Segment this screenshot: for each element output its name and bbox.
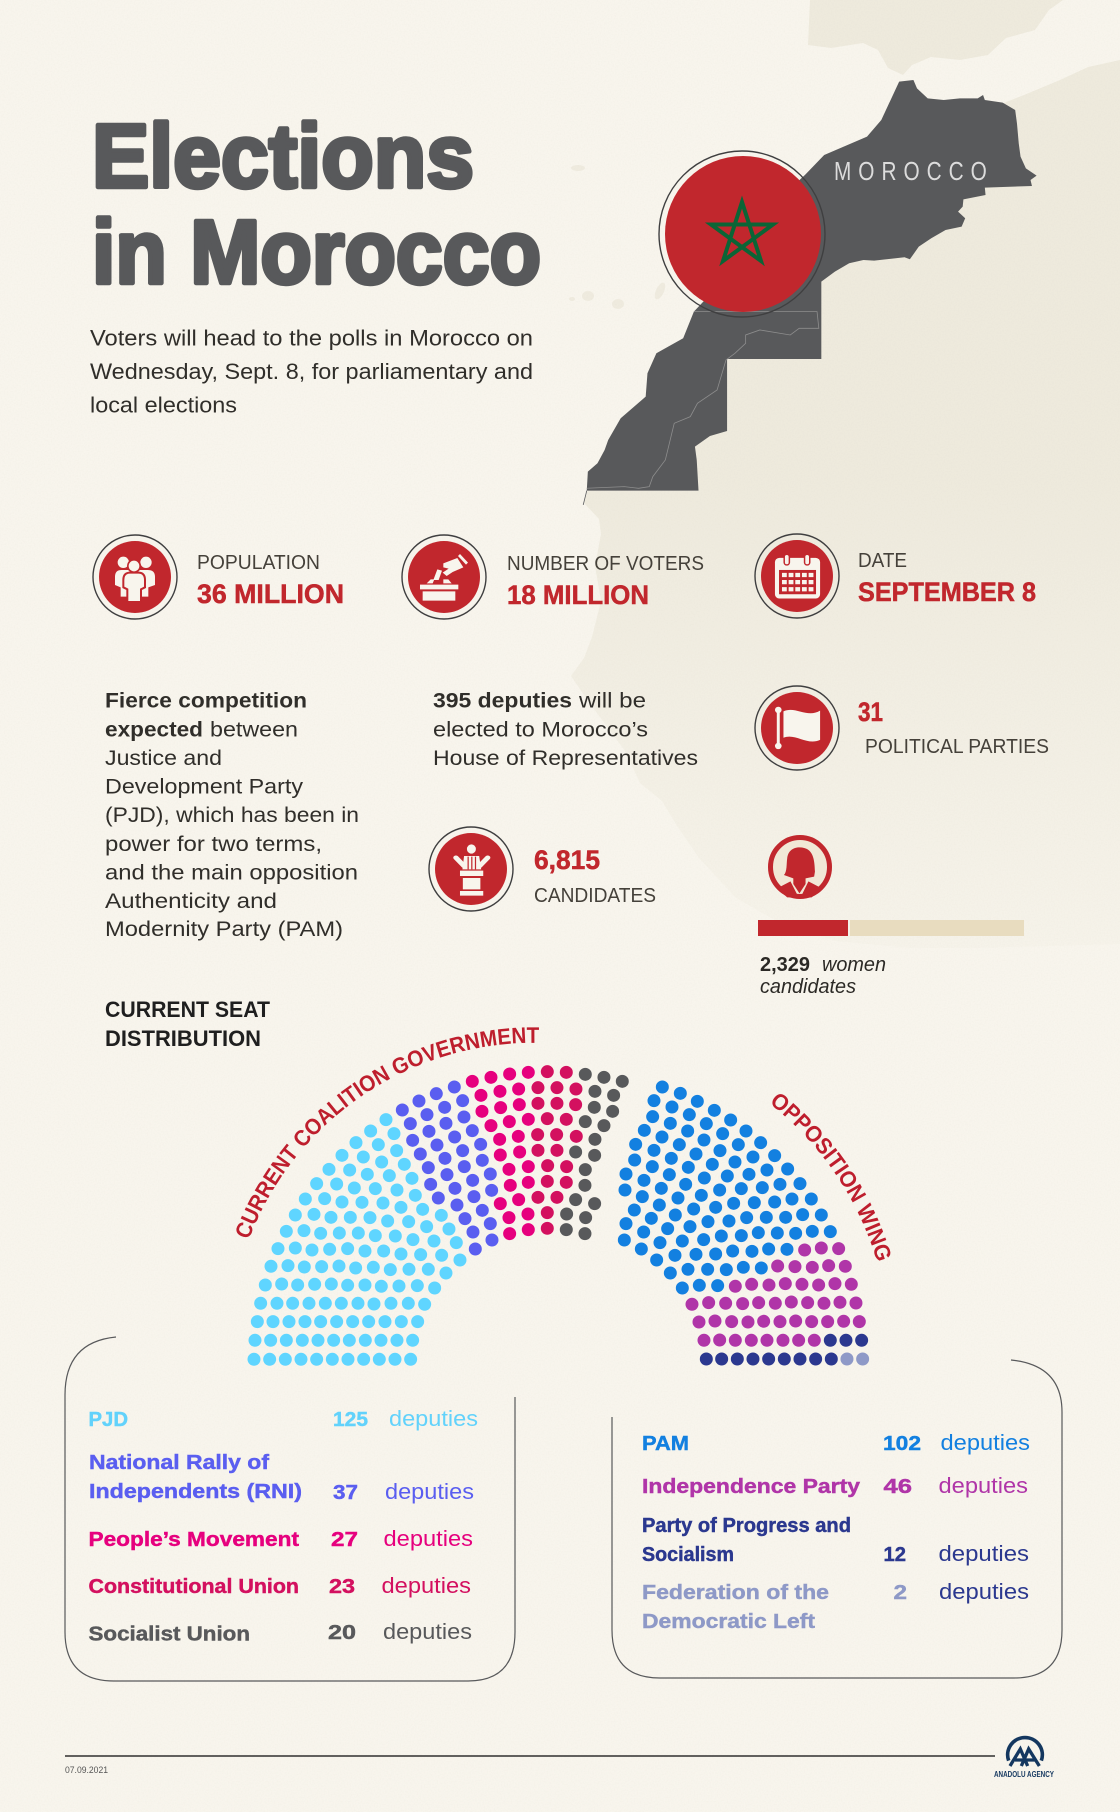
legend row: RNI: National Rally of — [89, 1451, 269, 1474]
panel: opposition legend — [612, 1360, 1062, 1678]
stat: date: SEPTEMBER 8 — [858, 577, 1036, 607]
intro text: Wednesday, Sept. 8, for parliamentary and — [90, 359, 533, 384]
legend row: Party of Progress and Socialism: 12 — [884, 1543, 906, 1566]
footer rule and date: 07.09.2021 — [65, 1765, 108, 1775]
icon: population — [93, 535, 177, 619]
stat: date — [858, 550, 1036, 607]
legend row: Independence Party: 46 — [884, 1475, 912, 1498]
stat: political parties: 31 — [858, 697, 883, 727]
text block: 395 deputies: 395 deputies — [433, 688, 572, 712]
map label: MOROCCO: MOROCCO — [834, 157, 987, 186]
seats: Independence Party — [692, 1248, 859, 1340]
background map: neighbouring land — [569, 0, 1120, 948]
legend row: Federation of the Democratic Left — [642, 1579, 1029, 1633]
legend row: Federation of the Democratic Left: Federation of the — [642, 1581, 829, 1604]
text block: fierce competition: Development Party — [105, 774, 303, 798]
legend row: PJD: 125 — [333, 1408, 368, 1431]
text block: fierce competition: Fierce competition — [105, 688, 307, 712]
title: in Morocco — [92, 203, 541, 303]
stat: women candidates — [760, 953, 886, 998]
legend row: PAM: 102 — [883, 1432, 921, 1455]
legend row: RNI — [89, 1451, 474, 1504]
legend row: People's Movement: People’s Movement — [88, 1528, 299, 1551]
curved label: opposition wing: OPPOSITION WING — [772, 1094, 890, 1261]
stat: number of voters: 18 MILLION — [507, 580, 649, 610]
seats: National Rally of Independents — [402, 1087, 492, 1249]
stat: population: POPULATION — [197, 552, 320, 574]
stat: number of voters — [507, 553, 704, 610]
logo: Anadolu Agency: ANADOLU AGENCY — [994, 1770, 1055, 1779]
icon: woman — [770, 838, 830, 897]
legend row: PAM: deputies — [940, 1430, 1030, 1455]
legend row: RNI: deputies — [385, 1479, 474, 1504]
legend row: RNI: Independents (RNI) — [89, 1480, 302, 1503]
legend row: Federation of the Democratic Left: deputies — [939, 1579, 1029, 1604]
seats: PAM — [624, 1087, 830, 1288]
text block: 395 deputies: House of Representatives — [433, 746, 698, 770]
legend row: PJD: PJD — [88, 1408, 128, 1431]
stat: political parties — [858, 697, 1049, 758]
intro text: Voters will head to the polls in Morocco on — [90, 326, 533, 350]
logo: Anadolu Agency — [994, 1738, 1055, 1779]
panel: coalition legend — [65, 1337, 515, 1681]
stat: population — [197, 552, 344, 609]
legend row: People's Movement: deputies — [384, 1526, 473, 1551]
text block: 395 deputies: will be — [578, 688, 646, 712]
legend row: Party of Progress and Socialism: deputies — [938, 1541, 1029, 1566]
legend row: People's Movement: 27 — [331, 1528, 358, 1551]
stat: women candidates: women — [822, 953, 886, 976]
seats: Party of Progress and Socialism — [706, 1340, 862, 1359]
seats: Socialist Union — [566, 1074, 622, 1234]
legend row: Constitutional Union — [88, 1573, 471, 1598]
title — [92, 107, 541, 303]
icon: flag — [755, 686, 839, 770]
stat: population: 36 MILLION — [197, 579, 344, 609]
heading: current seat distribution — [105, 997, 271, 1051]
legend row: PAM: PAM — [642, 1432, 689, 1455]
intro text: local elections — [90, 392, 237, 418]
text block: fierce competition: power for two terms, — [105, 832, 322, 856]
legend row: RNI: 37 — [333, 1481, 358, 1504]
text block: fierce competition: Justice and — [105, 746, 222, 770]
heading: current seat distribution: DISTRIBUTION — [105, 1026, 261, 1051]
legend row: Constitutional Union: Constitutional Union — [88, 1575, 299, 1598]
text block: fierce competition: Modernity Party (PAM) — [105, 917, 343, 941]
seats: Constitutional Union — [538, 1072, 576, 1228]
legend row: Socialist Union: Socialist Union — [88, 1622, 250, 1646]
seat chart: coalition government — [254, 1072, 622, 1359]
legend row: PJD: deputies — [389, 1406, 478, 1431]
text block: 395 deputies: elected to Morocco’s — [433, 718, 648, 742]
legend row: Independence Party: Independence Party — [642, 1475, 861, 1498]
stat: political parties: POLITICAL PARTIES — [865, 736, 1049, 758]
legend row: Independence Party — [642, 1473, 1028, 1498]
legend row: Constitutional Union: deputies — [382, 1573, 471, 1598]
intro text — [90, 326, 533, 418]
map: Morocco silhouette — [583, 80, 1037, 505]
text block: 395 deputies — [433, 688, 698, 770]
legend row: People's Movement — [88, 1526, 473, 1551]
legend row: Socialist Union: 20 — [328, 1621, 356, 1644]
text block: fierce competition: expected — [105, 718, 203, 742]
text block: fierce competition: (PJD), which has been in — [105, 803, 359, 827]
stat: candidates: CANDIDATES — [534, 885, 656, 907]
text block: fierce competition: Authenticity and — [105, 889, 277, 913]
legend row: Socialist Union: deputies — [383, 1619, 472, 1644]
legend row: Party of Progress and Socialism: Party of Progress and — [642, 1514, 851, 1537]
curved label: current coalition government: CURRENT COALITION GOVERNMENT — [236, 1027, 539, 1238]
seats: PJD — [254, 1120, 460, 1359]
text block: fierce competition: between — [210, 718, 298, 742]
seat chart: opposition wing — [624, 1087, 863, 1359]
legend row: Party of Progress and Socialism — [642, 1514, 1029, 1566]
stat: date: DATE — [858, 550, 907, 572]
bar: women share of candidates — [758, 920, 1024, 936]
seats: Federation of the Democratic Left — [847, 1339, 863, 1378]
legend row: PAM — [642, 1430, 1030, 1455]
stat: number of voters: NUMBER OF VOTERS — [507, 553, 704, 575]
stat: women candidates: candidates — [760, 975, 856, 998]
legend row: Federation of the Democratic Left: Democratic Left — [642, 1610, 815, 1633]
legend row: PJD — [88, 1406, 478, 1431]
seats: People's Movement — [472, 1072, 528, 1234]
legend row: Independence Party: deputies — [938, 1473, 1028, 1498]
title: Elections — [92, 107, 474, 207]
legend row: Constitutional Union: 23 — [329, 1575, 355, 1598]
text block: fierce competition: and the main opposition — [105, 860, 358, 884]
flag of Morocco — [659, 151, 825, 317]
icon: ballot box — [402, 535, 486, 619]
legend row: Party of Progress and Socialism: Socialism — [642, 1543, 734, 1566]
stat: women candidates: 2,329 — [760, 953, 810, 976]
stat: candidates: 6,815 — [534, 845, 600, 875]
icon: candidates podium — [429, 827, 513, 911]
icon: calendar — [755, 534, 839, 618]
legend row: Socialist Union — [88, 1619, 472, 1646]
legend row: Federation of the Democratic Left: 2 — [894, 1581, 907, 1604]
stat: candidates — [534, 845, 656, 907]
heading: current seat distribution: CURRENT SEAT — [105, 997, 271, 1022]
text block: fierce competition — [105, 688, 359, 941]
